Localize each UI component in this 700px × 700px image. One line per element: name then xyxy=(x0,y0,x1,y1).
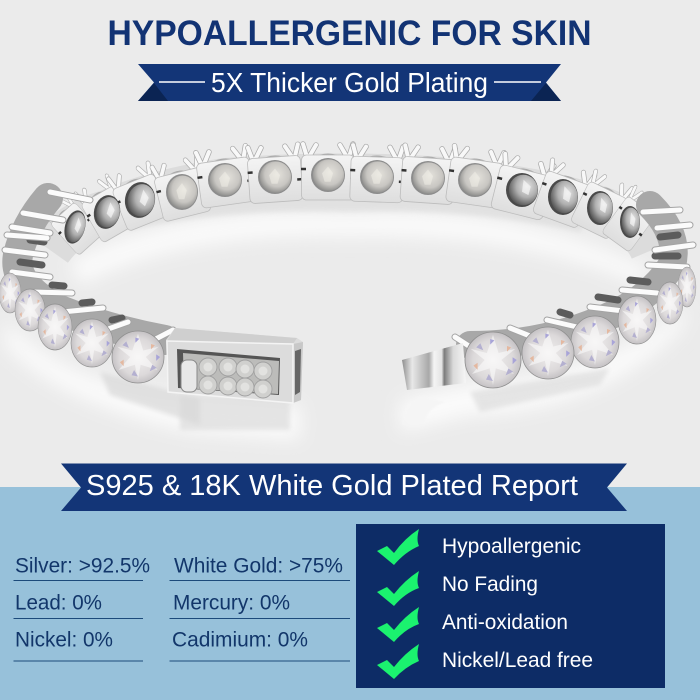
ribbon: report xyxy=(61,464,627,511)
benefit: anti-oxidation: Anti-oxidation xyxy=(442,611,568,634)
icon: check 1 xyxy=(377,529,419,565)
front row stones right xyxy=(465,267,696,388)
panel: benefits xyxy=(356,524,665,688)
panel: report background xyxy=(0,487,700,700)
clasp tab xyxy=(181,360,197,392)
right clasp tongue xyxy=(402,343,466,425)
panel: composition table xyxy=(14,554,350,661)
benefit: nickel/lead free: Nickel/Lead free xyxy=(442,649,593,672)
side and front chain walls xyxy=(17,198,678,345)
prong bars xyxy=(5,192,693,350)
cadimium: Cadimium: 0% xyxy=(172,628,308,652)
pave stones xyxy=(199,358,272,398)
icon: check 2 xyxy=(377,571,419,606)
front row stones left xyxy=(0,273,164,383)
silver: Silver: >92.5% xyxy=(15,554,150,578)
lead: Lead: 0% xyxy=(15,590,102,614)
back row stones xyxy=(61,158,640,246)
bracelet reflection xyxy=(5,195,690,440)
back row links xyxy=(43,144,662,256)
ribbon: plating xyxy=(138,64,561,101)
icon: check 3 xyxy=(377,607,419,642)
mercury: Mercury: 0% xyxy=(173,590,290,614)
benefit: no fading: No Fading xyxy=(442,573,538,596)
ribbon text: S925 & 18K White Gold Plated Report xyxy=(86,470,578,502)
white gold: White Gold: >75% xyxy=(174,554,343,578)
title: HYPOALLERGENIC FOR SKIN xyxy=(108,13,592,53)
back chain base xyxy=(50,175,652,250)
bracelet xyxy=(0,144,696,425)
ribbon text: 5X Thicker Gold Plating xyxy=(211,67,488,98)
left clasp box xyxy=(166,328,303,403)
nickel: Nickel: 0% xyxy=(15,628,113,652)
icon: check 4 xyxy=(377,644,419,679)
benefit: hypoallergenic: Hypoallergenic xyxy=(442,535,581,558)
